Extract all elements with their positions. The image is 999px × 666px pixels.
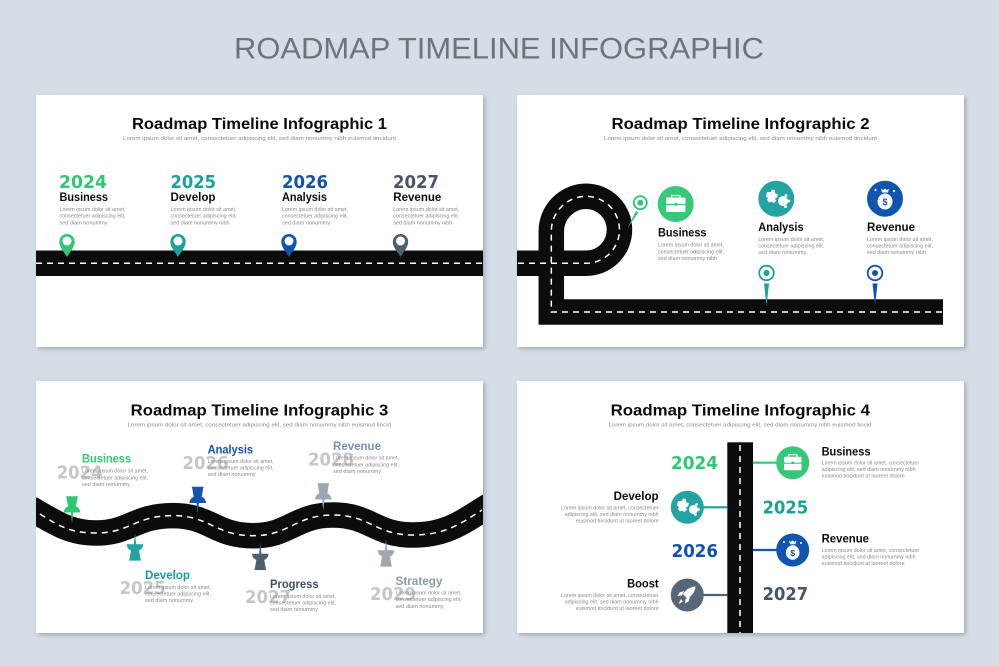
text: analysis: Analysis — [758, 222, 804, 234]
text: revenue — [822, 534, 919, 567]
milestone: 2029 strategy: sed diam nonummy — [396, 604, 444, 610]
pin: revenue — [315, 483, 332, 510]
heading 4: Roadmap Timeline Infographic 4 — [611, 403, 870, 420]
milestone: 2025 develop: consectetuer adipiscing elit, — [145, 592, 211, 598]
text: develop: euismod tincidunt ut laoreet dolore — [576, 519, 659, 525]
text: revenue: Lorem ipsum dolor sit amet, consectetuer — [822, 548, 919, 554]
text: revenue: adipiscing elit, sed diam nonummy nibh — [822, 555, 916, 561]
milestone 2025: Lorem ipsum dolor sit amet, — [170, 207, 236, 213]
milestone: 2026 analysis: Lorem ipsum dolor sit amet, — [208, 459, 274, 465]
text: boost — [561, 579, 659, 612]
milestone: 2027 progress: 2027 — [245, 587, 291, 608]
milestone 2027: sed diam nonummy nibh — [393, 220, 452, 226]
pin: strategy — [378, 539, 394, 567]
milestone 2024: 2024 — [59, 172, 107, 193]
milestone: 2027 progress: Lorem ipsum dolor sit amet, — [270, 594, 336, 600]
icon: rocket — [671, 578, 704, 612]
milestone: 2026 analysis: 2026 — [182, 453, 228, 474]
milestone: 2026 analysis: sed diam nonummy — [208, 472, 256, 478]
milestone 2025: consectetuer adipiscing elit, — [170, 214, 236, 220]
text: business — [822, 446, 919, 480]
milestone 2026: 2026 — [282, 172, 328, 193]
milestone: 2027 progress — [245, 579, 336, 613]
milestone 2024: consectetuer adipiscing elit, — [60, 214, 126, 220]
vertical road — [727, 442, 753, 633]
text: develop: Develop — [614, 491, 659, 503]
panel: infographic 1 — [36, 95, 483, 347]
pin: revenue — [868, 266, 882, 306]
text: develop: adipiscing elit, sed diam nonummy nibh — [565, 512, 659, 518]
milestone: 2028 revenue: Revenue — [333, 441, 381, 453]
text: business: adipiscing elit, sed diam nonummy nibh — [822, 467, 916, 473]
text: boost: Boost — [627, 579, 659, 591]
text: revenue: Lorem ipsum dolor sit amet, — [867, 237, 933, 243]
milestone 2024: Business — [60, 192, 108, 204]
text: business: Lorem ipsum dolor sit amet, consectetuer — [822, 461, 919, 467]
milestone 2027: 2027 — [393, 172, 439, 193]
milestone: 2024 business: Lorem ipsum dolor sit amet, — [82, 469, 148, 475]
text: boost: adipiscing elit, sed diam nonummy nibh — [565, 600, 659, 606]
milestone: 2025 develop: sed diam nonummy — [145, 598, 193, 604]
icon: money bag — [776, 534, 809, 566]
text: boost: euismod tincidunt ut laoreet dolore — [576, 606, 659, 612]
milestone: 2027 progress: sed diam nonummy — [270, 607, 318, 613]
heading 2: Roadmap Timeline Infographic 2 — [612, 116, 870, 133]
milestone 2027 — [393, 172, 459, 257]
text: revenue: sed diam nonummy nibh — [867, 250, 926, 256]
icon: money bag: $ — [882, 197, 888, 207]
year 2025: 2025 — [763, 497, 808, 518]
text: business: sed diam nonummy nibh — [658, 256, 717, 262]
text: revenue: Revenue — [822, 534, 869, 546]
icon: money bag: $ — [790, 548, 795, 558]
looping road — [517, 196, 943, 312]
text: business: Business — [822, 446, 870, 458]
milestone 2025: Develop — [170, 192, 216, 204]
milestone 2025: sed diam nonummy nibh — [170, 220, 230, 226]
text: business: Lorem ipsum dolor sit amet, — [658, 243, 724, 249]
milestone 2026: Lorem ipsum dolor sit amet, — [282, 207, 348, 213]
winding road — [30, 505, 490, 536]
icon: briefcase — [776, 446, 809, 479]
milestone: 2026 analysis — [182, 444, 274, 478]
milestone: 2028 revenue — [308, 441, 399, 475]
milestone: 2025 develop: Lorem ipsum dolor sit amet, — [145, 585, 211, 591]
year 2027: 2027 — [763, 584, 808, 605]
text: revenue: consectetuer adipiscing elit, — [867, 244, 933, 250]
milestone 2026: sed diam nonummy — [282, 220, 330, 226]
milestone: 2027 progress: consectetuer adipiscing elit, — [270, 601, 336, 607]
connectors — [702, 463, 778, 595]
milestone: 2027 progress: Progress — [270, 579, 319, 591]
subtitle 3: Lorem ipsum dolor sit amet, consectetuer adipiscing elit, sed diam nonummy nibh euismod tincid — [128, 422, 391, 428]
year 2026: 2026 — [672, 541, 718, 562]
pin: business — [64, 496, 80, 524]
pin: analysis — [189, 487, 206, 514]
milestone 2024: sed diam nonummy — [60, 220, 108, 226]
subtitle 4: Lorem ipsum dolor sit amet, consectetuer adipiscing elit, sed diam nonummy nibh euismod tincid — [609, 422, 872, 428]
text: analysis: consectetuer adipiscing elit, — [758, 244, 824, 250]
milestone 2025: 2025 — [170, 172, 216, 193]
milestone: 2029 strategy: consectetuer adipiscing elit, — [396, 597, 462, 603]
text: analysis: sed diam nonummy — [758, 250, 807, 256]
milestone: 2028 revenue: 2028 — [308, 450, 354, 471]
text: boost: Lorem ipsum dolor sit amet, consectetuer — [561, 593, 659, 599]
milestone 2027: Lorem ipsum dolor sit amet, — [393, 207, 459, 213]
milestone 2026 — [281, 172, 348, 257]
milestone: 2024 business: Business — [82, 454, 131, 466]
milestone: 2024 business: 2024 — [57, 463, 103, 484]
text: analysis: Lorem ipsum dolor sit amet, — [758, 237, 824, 243]
milestone: 2026 analysis: consectetuer adipiscing elit, — [208, 466, 274, 472]
icon: money bag — [867, 181, 903, 217]
milestone: 2026 analysis: Analysis — [208, 444, 253, 456]
milestone: 2025 develop — [120, 570, 211, 604]
pin: loop — [628, 196, 647, 228]
heading 3: Roadmap Timeline Infographic 3 — [131, 403, 388, 420]
milestone: 2029 strategy: 2029 — [370, 584, 416, 605]
text: business: Business — [658, 228, 706, 240]
milestone: 2029 strategy: Strategy — [396, 576, 443, 588]
icon: puzzle gears — [671, 491, 704, 524]
milestone: 2024 business — [57, 454, 148, 488]
milestone 2024: Lorem ipsum dolor sit amet, — [60, 207, 126, 213]
milestone 2027: Revenue — [393, 192, 441, 204]
milestone 2026: Analysis — [282, 192, 327, 204]
text: business — [658, 228, 724, 262]
milestone: 2028 revenue: consectetuer adipiscing elit, — [333, 462, 399, 468]
milestone: 2025 develop: 2025 — [120, 578, 166, 599]
icon: puzzle gears — [758, 181, 794, 217]
milestone: 2029 strategy: Lorem ipsum dolor sit amet, — [396, 591, 462, 597]
text: revenue: euismod tincidunt ut laoreet dolore — [822, 561, 905, 567]
pin: progress — [252, 543, 269, 570]
subtitle 1: Lorem ipsum dolor sit amet, consectetuer adipiscing elit, sed diam nonummy nibh euismod tincidunt — [123, 136, 397, 142]
text: develop — [561, 491, 659, 525]
milestone: 2024 business: sed diam nonummy — [82, 482, 130, 488]
pin: analysis — [759, 266, 774, 306]
milestone: 2028 revenue: sed diam nonummy — [333, 469, 381, 475]
milestone 2026: consectetuer adipiscing elit, — [282, 214, 348, 220]
text: revenue — [867, 222, 933, 256]
heading 1: Roadmap Timeline Infographic 1 — [132, 116, 387, 133]
main title: ROADMAP TIMELINE INFOGRAPHIC — [234, 32, 764, 65]
milestone 2025 — [170, 172, 236, 257]
panel: infographic 2 — [517, 95, 964, 347]
pin: develop — [127, 533, 143, 561]
straight road — [36, 250, 483, 276]
subtitle 2: Lorem ipsum dolor sit amet, consectetuer adipiscing elit, sed diam nonummy nibh euismod tincidunt — [604, 136, 878, 142]
text: revenue: Revenue — [867, 222, 915, 234]
icon: briefcase — [658, 186, 694, 222]
milestone 2024 — [59, 172, 126, 257]
year 2024: 2024 — [671, 453, 718, 474]
milestone: 2028 revenue: Lorem ipsum dolor sit amet, — [333, 456, 399, 462]
milestone 2027: consectetuer adipiscing elit, — [393, 214, 459, 220]
panel: infographic 4 — [517, 381, 964, 633]
text: develop: Lorem ipsum dolor sit amet, consectetuer — [561, 506, 659, 512]
text: analysis — [758, 222, 824, 256]
milestone: 2024 business: consectetuer adipiscing elit, — [82, 476, 148, 482]
text: business: consectetuer adipiscing elit, — [658, 249, 724, 255]
panel: infographic 3 — [30, 381, 490, 633]
milestone: 2029 strategy — [370, 576, 462, 610]
text: business: euismod tincidunt ut laoreet dolore — [822, 474, 905, 480]
milestone: 2025 develop: Develop — [145, 570, 190, 582]
